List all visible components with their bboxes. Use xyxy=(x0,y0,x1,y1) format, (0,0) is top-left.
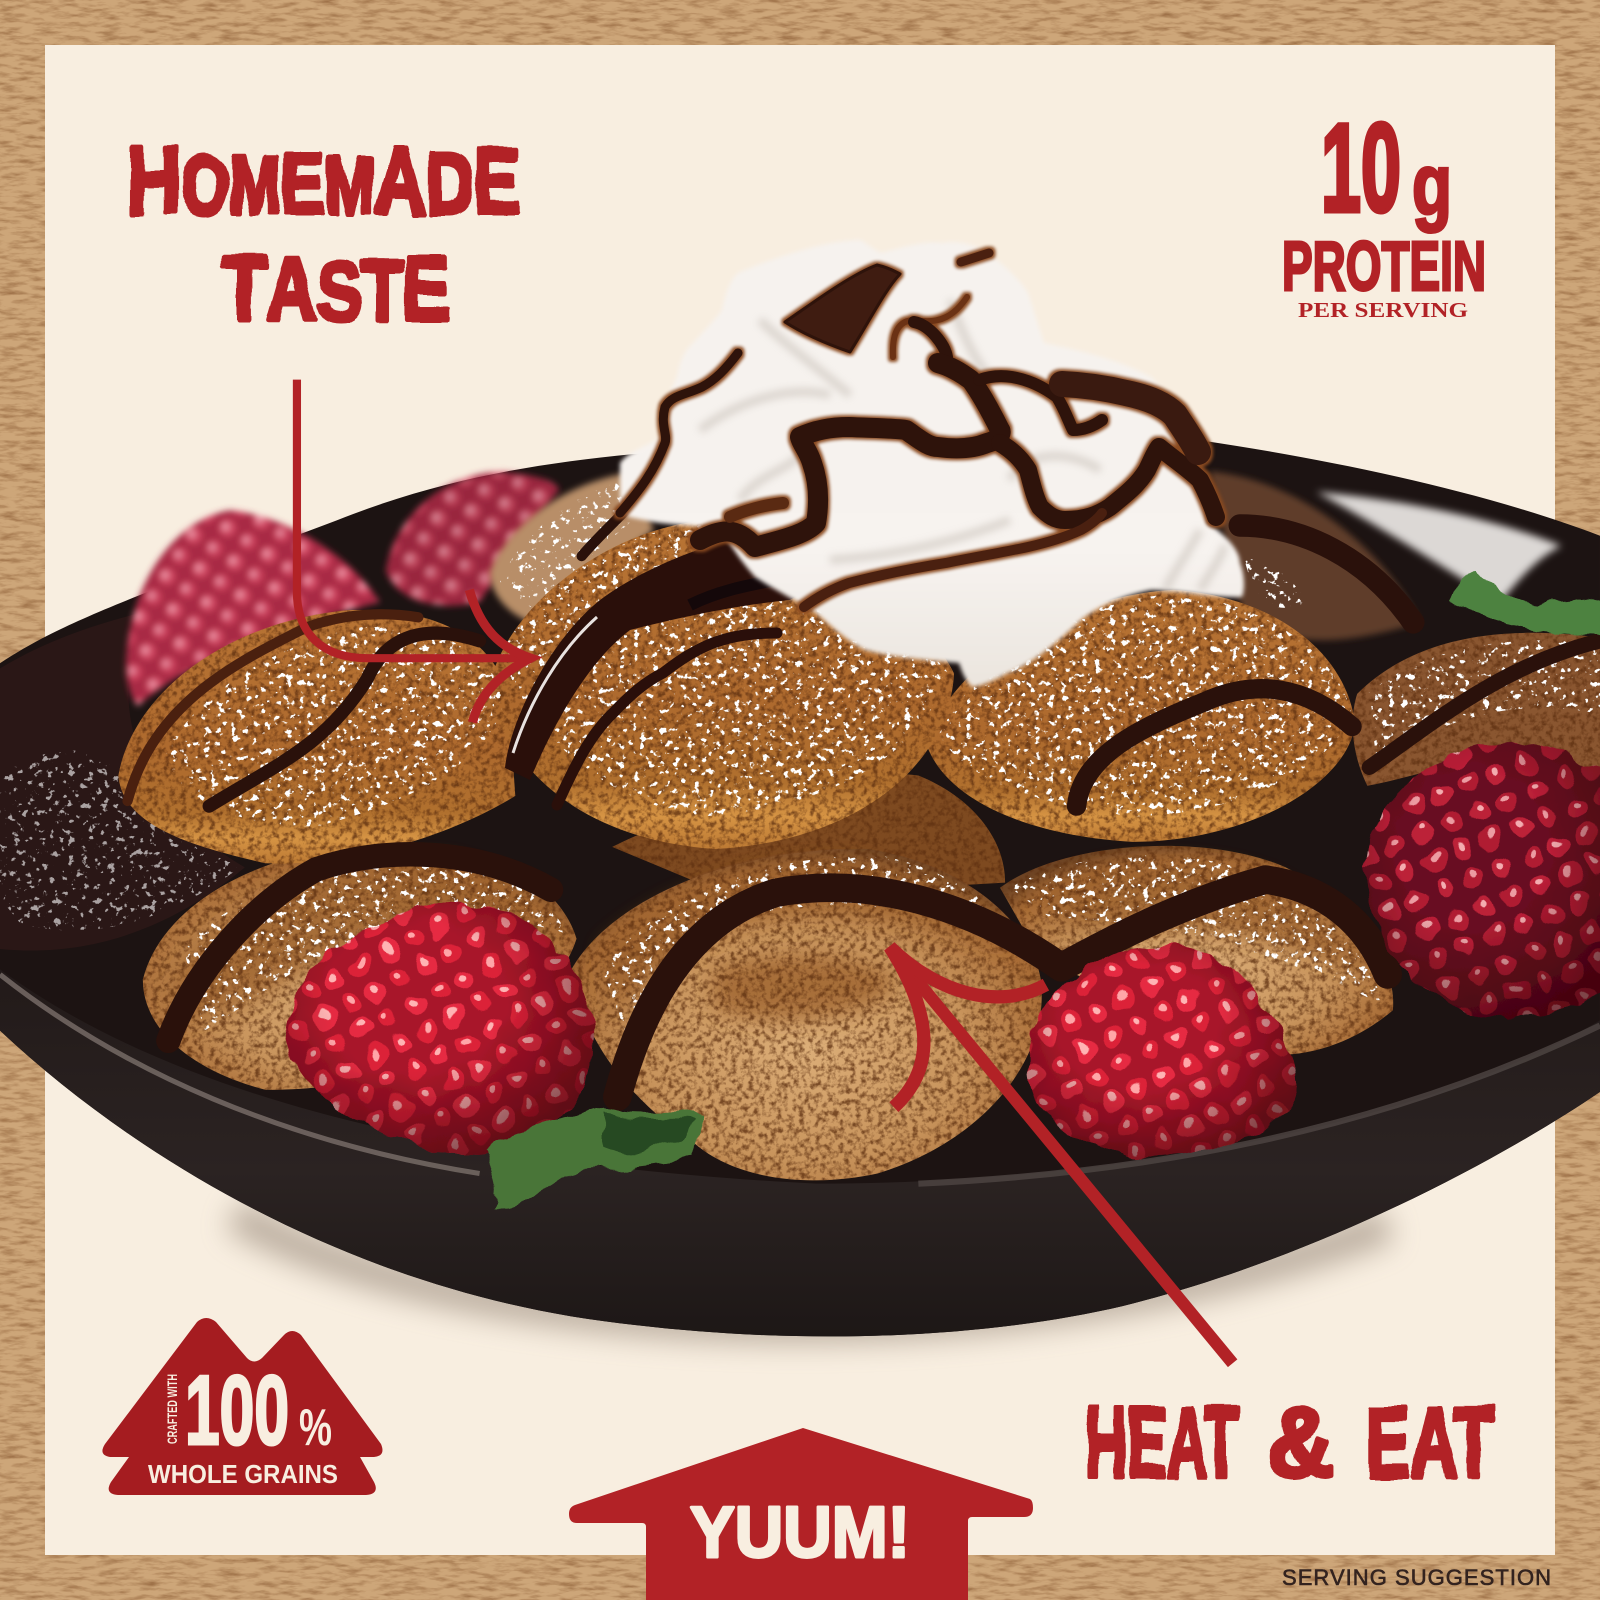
whipped cream with chocolate xyxy=(505,240,1244,805)
pancake: far right xyxy=(1353,633,1600,786)
pancake: back right xyxy=(1209,471,1420,640)
raspberries behind xyxy=(126,471,559,706)
callout: 10g protein: g xyxy=(1412,137,1452,233)
pancake: lower right xyxy=(1000,846,1393,1055)
arrow badge: yuum: YUUM! xyxy=(690,1493,910,1573)
plate highlight xyxy=(1316,492,1561,602)
badge: 100% whole grains: CRAFTED WITH xyxy=(164,1374,180,1444)
pancake: lower left xyxy=(143,842,577,1090)
heading: heat and eat xyxy=(1086,1386,1494,1499)
badge: 100% whole grains: 100 xyxy=(185,1355,289,1465)
toasted tops: lower pancakes xyxy=(173,862,1378,1020)
plate inner left xyxy=(0,612,245,951)
note: serving suggestion: SERVING SUGGESTION xyxy=(1282,1565,1551,1590)
plate front wall xyxy=(0,969,1600,1336)
arrow: homemade taste xyxy=(297,380,531,722)
pancake: lower centre xyxy=(571,849,1042,1180)
lower pancakes xyxy=(143,842,1393,1180)
mint leaves xyxy=(484,566,1600,1210)
cinnamon mottling xyxy=(118,520,1600,1180)
pancake: right xyxy=(927,590,1355,842)
heading: homemade taste xyxy=(128,127,520,340)
powdered sugar: pancakes xyxy=(163,480,1600,1051)
raspberry: lower left xyxy=(286,903,592,1153)
heading: homemade taste: TASTE xyxy=(222,238,450,340)
rim highlight xyxy=(0,974,480,1173)
heading: homemade taste: HOMEMADE xyxy=(128,127,520,234)
pancake: behind centre xyxy=(612,774,1005,898)
plate shadow xyxy=(235,1214,1388,1325)
raspberry: back centre xyxy=(386,471,559,606)
plate xyxy=(0,441,1600,1336)
powdered sugar: plate xyxy=(0,750,240,931)
raspberries front xyxy=(286,743,1600,1158)
arrow: heat and eat xyxy=(890,947,1233,1363)
raspberry: lower right xyxy=(1029,946,1296,1158)
back pancakes xyxy=(490,471,1600,898)
badge: 100% whole grains: WHOLE GRAINS xyxy=(148,1459,338,1489)
chocolate on cream xyxy=(620,253,1216,607)
pancake: centre xyxy=(488,520,954,849)
arrow badge: yuum xyxy=(569,1428,1033,1600)
heading: heat and eat: & xyxy=(1268,1386,1334,1498)
raspberry: far right xyxy=(1365,743,1600,1018)
badge: 100% whole grains xyxy=(102,1318,382,1495)
badge: 100% whole grains: % xyxy=(299,1399,332,1457)
chocolate drizzle: pancakes xyxy=(128,459,1600,1097)
cream xyxy=(620,240,1244,687)
heading: heat and eat: HEAT xyxy=(1086,1387,1239,1499)
callout: 10g protein: PROTEIN xyxy=(1282,227,1486,305)
pancake: back left xyxy=(490,471,653,622)
cream shading xyxy=(700,300,1225,590)
photo: plate of mini pancakes xyxy=(0,240,1600,1363)
raspberry: back left xyxy=(126,510,380,706)
pancake: left xyxy=(118,610,515,864)
callout: 10g protein xyxy=(1282,99,1486,322)
heading: heat and eat: EAT xyxy=(1366,1387,1494,1499)
chocolate ribbon on centre pancake xyxy=(505,525,840,805)
callout: 10g protein: 10 xyxy=(1321,99,1401,238)
upper pancakes xyxy=(118,520,1355,864)
callout: 10g protein: PER SERVING xyxy=(1298,298,1468,322)
